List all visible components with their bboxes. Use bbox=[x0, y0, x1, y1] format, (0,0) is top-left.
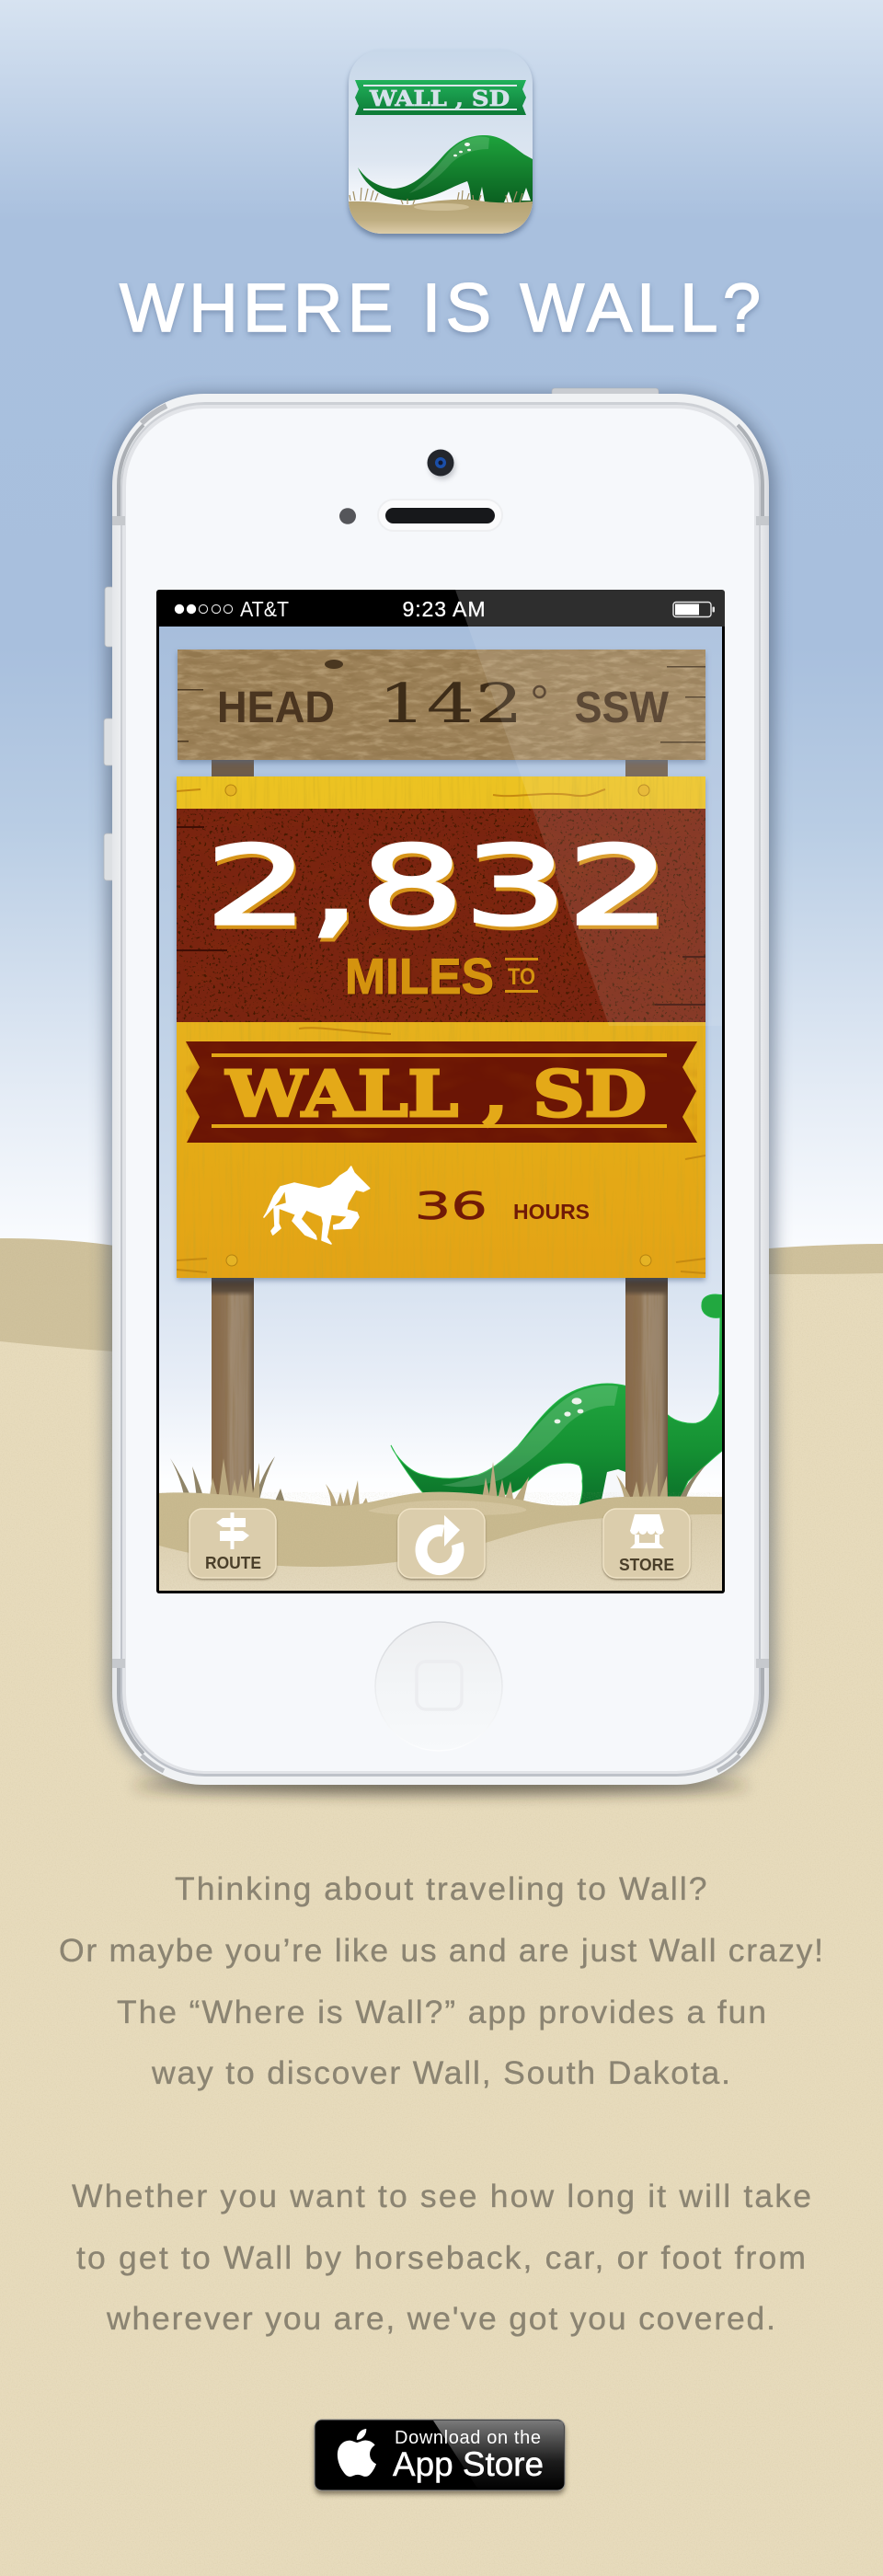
phone camera bbox=[427, 449, 455, 479]
yellow cracks bbox=[177, 789, 705, 1273]
mileage number 2,832: 2,832 bbox=[205, 822, 671, 949]
miles label bbox=[348, 958, 493, 995]
sign text: ssw: SSW bbox=[574, 684, 670, 732]
dinosaur bbox=[391, 1294, 727, 1509]
description paragraph one: way to discover Wall, South Dakota. bbox=[151, 2054, 730, 2091]
signal dots bbox=[175, 604, 233, 614]
description paragraph two bbox=[72, 2178, 811, 2337]
description paragraph one: Thinking about traveling to Wall? bbox=[175, 1870, 706, 1907]
icon: wall sd green banner: WALL , SD bbox=[369, 86, 510, 111]
description paragraph one bbox=[59, 1870, 823, 2091]
phone: white iPhone body bbox=[104, 388, 769, 1785]
right signpost bbox=[625, 1278, 668, 1503]
icon: refresh arrow bbox=[421, 1515, 460, 1570]
description paragraph two: to get to Wall by horseback, car, or foot from bbox=[76, 2239, 806, 2276]
gap between dinosaur legs bbox=[602, 1469, 625, 1500]
phone top sleep button bbox=[552, 388, 659, 397]
icon: apple logo bbox=[338, 2429, 376, 2477]
sign rivets bbox=[225, 785, 651, 1266]
phone corner metal highlights bbox=[119, 406, 763, 1771]
red mileage band bbox=[177, 809, 705, 1022]
description paragraph one: Or maybe you’re like us and are just Wall crazy! bbox=[59, 1932, 823, 1969]
phone screen bbox=[156, 590, 727, 1593]
sign degree symbol bbox=[533, 686, 545, 697]
status bar bbox=[159, 592, 722, 627]
signposts bbox=[212, 760, 668, 1503]
wall sd banner bbox=[186, 1041, 697, 1143]
icon: white running horse bbox=[264, 1167, 370, 1244]
grass tufts bbox=[170, 1456, 706, 1509]
to label bbox=[505, 958, 538, 993]
hours label: HOURS bbox=[513, 1200, 590, 1224]
mileage number 2,832 bbox=[214, 841, 659, 942]
sign text: bearing: 142 bbox=[378, 672, 523, 735]
background: sky bbox=[0, 0, 883, 1306]
icon: route signpost bbox=[216, 1512, 249, 1549]
icon: wall sd green banner bbox=[355, 80, 526, 115]
phone speaker bbox=[378, 500, 502, 531]
sign cracks and knot bbox=[178, 660, 705, 743]
miles label: MILES bbox=[345, 948, 494, 1005]
clock: 9:23 AM bbox=[403, 597, 486, 621]
phone proximity sensor bbox=[339, 508, 356, 524]
sign text: head: HEAD bbox=[217, 684, 335, 732]
icon: store awning bbox=[630, 1514, 664, 1548]
screen glass glare bbox=[455, 590, 725, 1026]
yellow and red mileage sign bbox=[177, 776, 705, 1278]
to label: TO bbox=[508, 964, 535, 990]
icon: green dinosaur bbox=[358, 135, 533, 204]
button: route bbox=[189, 1509, 276, 1578]
app store badge bbox=[315, 2420, 565, 2494]
hours number 36: 36 bbox=[415, 1184, 487, 1228]
phone antenna bands bbox=[112, 516, 769, 1668]
phone shadow bbox=[107, 394, 774, 1794]
dinosaur spots bbox=[555, 1397, 583, 1423]
wooden heading sign bbox=[178, 650, 705, 760]
badge large line: App Store bbox=[393, 2445, 544, 2483]
button: refresh bbox=[398, 1509, 485, 1578]
miles label: MILES bbox=[346, 949, 495, 1006]
icon: desert ground bbox=[349, 188, 533, 234]
button: route: ROUTE bbox=[205, 1554, 261, 1572]
carrier label: AT&T bbox=[240, 597, 289, 621]
screen desert ground bbox=[159, 1492, 722, 1591]
button: store bbox=[603, 1509, 690, 1578]
description paragraph one: The “Where is Wall?” app provides a fun bbox=[117, 1994, 766, 2030]
mileage number 2,832: 2,832 bbox=[207, 826, 672, 953]
description paragraph two: Whether you want to see how long it will take bbox=[72, 2178, 811, 2214]
background: desert sand with dunes bbox=[0, 1238, 883, 1351]
button: store: STORE bbox=[619, 1556, 674, 1574]
badge small line: Download on the bbox=[395, 2428, 541, 2448]
dinosaur gloss highlight bbox=[442, 1386, 618, 1487]
title: WHERE IS WALL? bbox=[120, 270, 761, 346]
phone side volume buttons bbox=[104, 587, 114, 880]
wall sd banner: WALL , SD bbox=[225, 1058, 647, 1132]
phone home button bbox=[375, 1622, 502, 1751]
app icon bbox=[349, 50, 533, 237]
description paragraph two: wherever you are, we've got you covered. bbox=[106, 2300, 775, 2337]
battery icon bbox=[673, 602, 715, 616]
